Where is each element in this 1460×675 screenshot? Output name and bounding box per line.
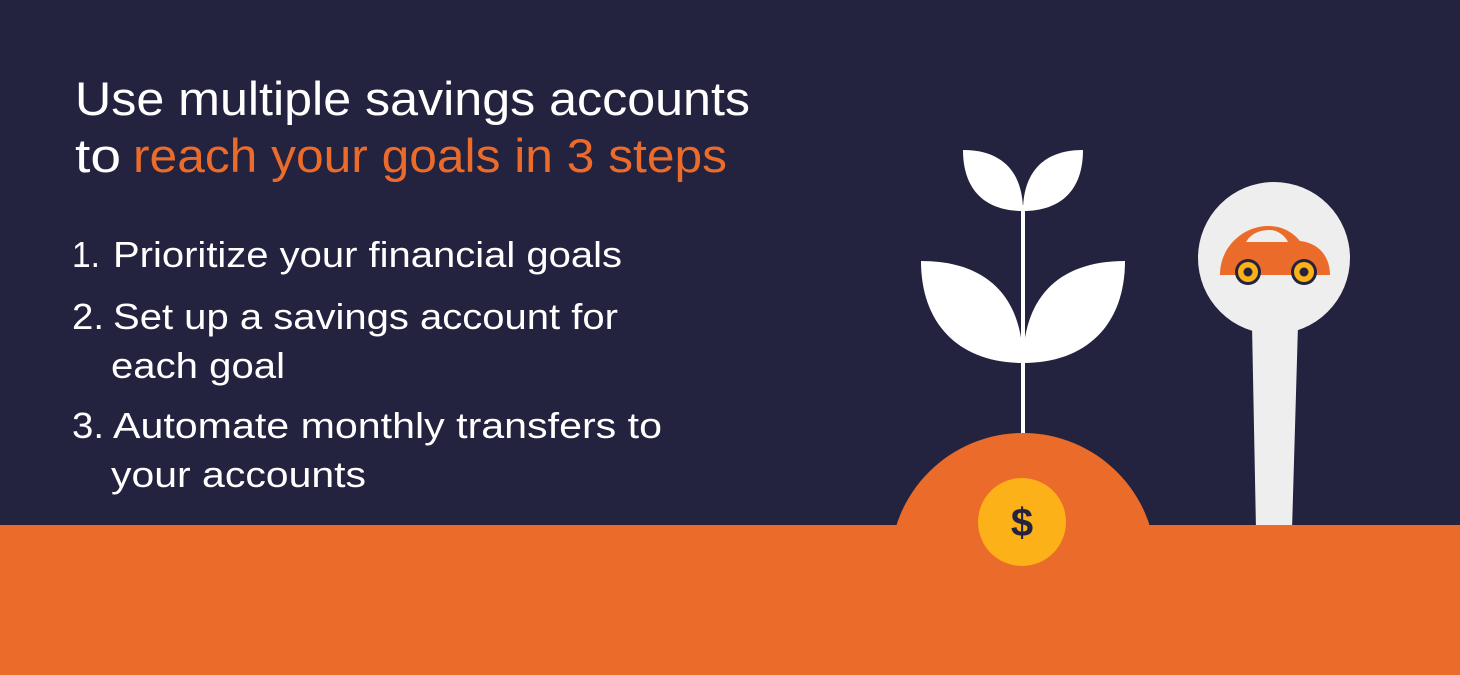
steps list [72,234,662,495]
title: reach your goals in 3 steps [133,129,727,182]
icon: mound with coin: $ [1011,501,1033,545]
title: Use multiple savings accounts [75,72,750,125]
step 3 [72,405,662,495]
step 2: 2. [72,296,104,337]
step 3: 3. [72,405,104,446]
icon: plant [921,150,1125,440]
step 3: your accounts [111,454,366,495]
step 3: Automate monthly transfers to [113,405,662,446]
title [75,72,750,182]
ground [0,525,1460,675]
step 1: 1. [72,234,100,275]
step 2: each goal [111,345,285,386]
icon: mound with coin [890,433,1156,675]
title: to [75,129,121,182]
step 2: Set up a savings account for [113,296,618,337]
step 2 [72,296,618,386]
icon: sign with car [1198,182,1350,530]
car [1220,226,1330,285]
step 1: Prioritize your financial goals [113,234,622,275]
